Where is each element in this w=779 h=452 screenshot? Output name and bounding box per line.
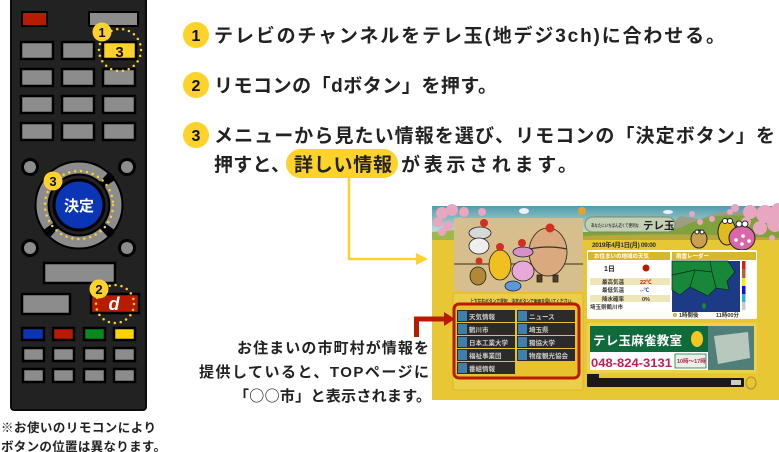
number buttons: [21, 42, 135, 140]
banner characters: [691, 218, 755, 250]
menu rows: [457, 310, 575, 374]
weather panel: 最高気温: [602, 278, 625, 286]
menu labels: 物産観光協会: [529, 351, 568, 360]
step 3: 押すと、: [214, 154, 290, 176]
page background: [432, 238, 779, 400]
button 3 highlighted: [103, 42, 136, 61]
red frame: [454, 304, 579, 378]
callout text: 提供していると、TOPページに: [199, 364, 429, 381]
step 3: メニューから見たい情報を選び、リモコンの「決定ボタン」を: [214, 125, 775, 147]
step 1: テレビのチャンネルをテレ玉(地デジ3ch)に合わせる。: [214, 24, 725, 47]
d button: [91, 294, 139, 314]
advertisement: 048-824-3131: [591, 358, 673, 370]
highlight pill: 詳しい情報: [294, 153, 392, 176]
sun icon: [642, 264, 650, 272]
d button: d: [108, 294, 120, 314]
remote badge 3: [44, 172, 62, 190]
remote note: ※お使いのリモコンにより: [1, 420, 156, 435]
weather panel: 22℃: [640, 279, 652, 286]
gray left button: [22, 294, 70, 314]
cherry blossoms right: [689, 203, 779, 241]
menu labels: 埼玉県: [529, 325, 549, 334]
advertisement: [587, 323, 757, 373]
menu labels: ニュース: [529, 313, 555, 321]
date text: 2019年4月1日(月) 09:00: [592, 240, 656, 249]
menu labels: 番組情報: [469, 364, 496, 373]
menu panel: [453, 293, 583, 390]
menu labels: 福祉事業団: [469, 351, 502, 360]
cherry blossoms left: [433, 204, 486, 236]
remote badge 3: 3: [49, 174, 57, 189]
logo pill: テレ玉: [643, 220, 675, 232]
weather panel: 1日: [604, 265, 615, 273]
menu panel: 上下左右ボタンで選択、決定ボタンで画面を開いてください。: [470, 298, 575, 305]
radar legend: [742, 261, 746, 310]
weather panel: 降水確率: [602, 295, 625, 303]
characters: [469, 227, 567, 291]
menu labels: 日本工業大学: [469, 338, 508, 347]
step 3: [183, 122, 775, 178]
remote badge 1: 1: [98, 25, 106, 40]
radar map: [672, 261, 740, 312]
video panel: [454, 218, 583, 291]
dotted highlight circles: [45, 29, 141, 323]
callout text: お住まいの市町村が情報を: [237, 339, 429, 357]
color buttons: [22, 328, 135, 340]
power button: [22, 12, 47, 26]
remote control: [11, 0, 146, 410]
menu labels: [469, 312, 568, 373]
remote note: [1, 420, 166, 452]
menu labels: 天気情報: [469, 312, 496, 321]
step 1: 1: [192, 28, 201, 45]
ticker bar: [587, 374, 756, 389]
sky banner: [432, 206, 779, 240]
weather panel: 雨雲レーダー: [676, 252, 709, 260]
callout text: [199, 339, 431, 406]
weather panel: 最低気温: [602, 286, 625, 294]
red arrow: [416, 312, 455, 337]
weather panel: お住まいの地域の天気: [594, 252, 650, 260]
weather panel: 0%: [642, 297, 650, 303]
radar caption: 11時00分: [716, 311, 739, 319]
top gray button: [89, 12, 138, 26]
side round buttons: [22, 160, 134, 256]
step 3: 3: [192, 128, 201, 145]
menu labels: 鶴川市: [469, 325, 489, 334]
lower gray buttons: [23, 348, 135, 382]
step 2: 2: [192, 78, 201, 95]
caps: [476, 219, 554, 264]
highlight pill: [286, 149, 398, 178]
logo pill: あなたにいちばん近くて便利な: [591, 222, 639, 229]
TV screen screenshot: [432, 203, 779, 400]
logo pill: [585, 217, 675, 232]
callout text: 「○○市」と表示されます。: [234, 385, 431, 406]
step 2: リモコンの「dボタン」を押す。: [214, 75, 497, 97]
radar caption: [673, 311, 739, 319]
weather panel: [587, 250, 757, 319]
weather panel: --℃: [640, 287, 650, 294]
remote badge 2: 2: [95, 282, 103, 297]
remote badge 2: [90, 280, 108, 298]
yellow arrow: [349, 178, 428, 265]
weather panel: 埼玉県鶴川市: [590, 303, 624, 311]
direction pad: [42, 168, 116, 242]
remote body: [11, 0, 146, 410]
radar caption: 1時間後: [679, 311, 699, 319]
menu labels: 獨協大学: [529, 338, 556, 347]
enter button: 決定: [64, 197, 94, 215]
gray wide button: [44, 263, 115, 283]
advertisement: テレ玉麻雀教室: [593, 333, 682, 348]
remote badge 1: [92, 22, 112, 42]
step 3: が表示されます。: [401, 153, 577, 176]
enter button: [50, 176, 108, 234]
menu icons: [458, 311, 527, 373]
advertisement: 10時〜17時: [677, 357, 706, 365]
button 3 highlighted: 3: [115, 44, 124, 61]
